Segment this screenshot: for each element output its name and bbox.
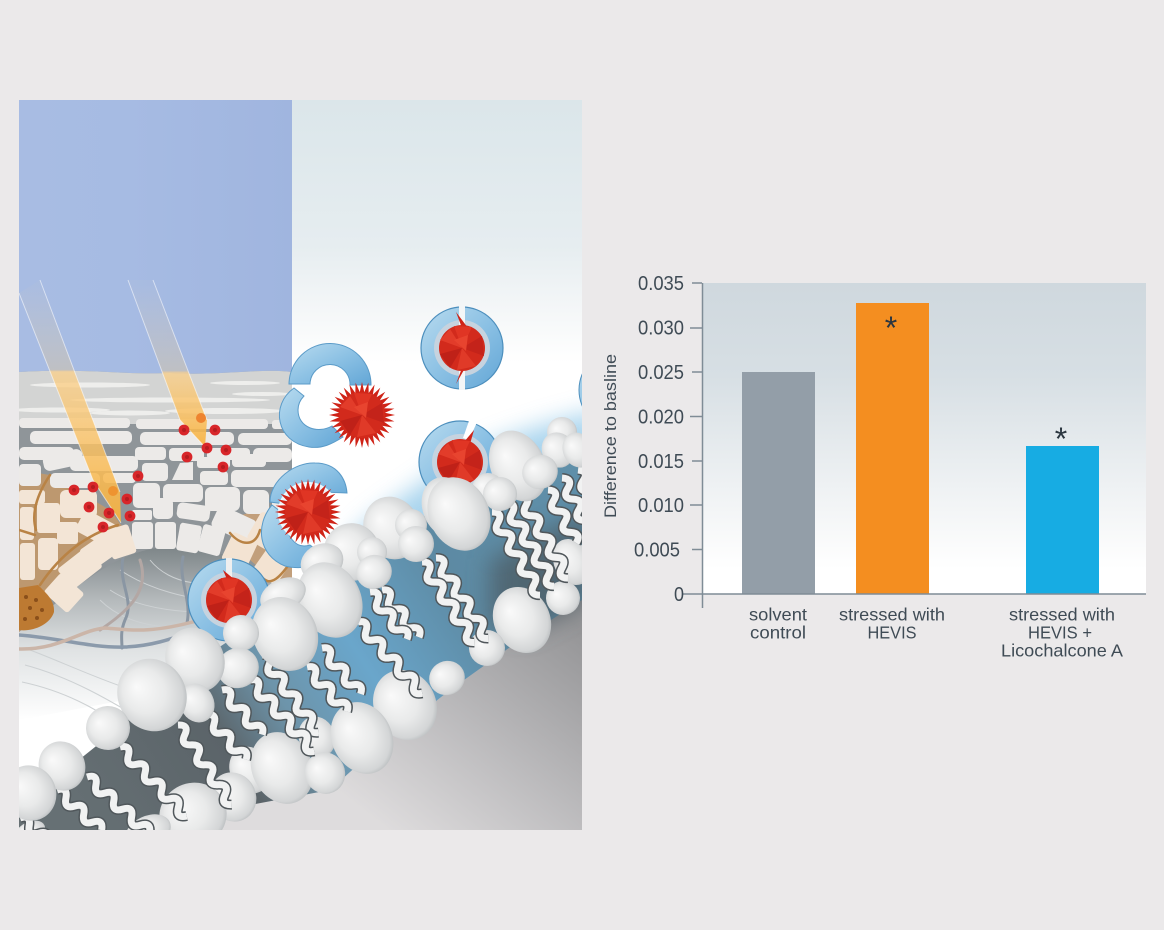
y axis values: 0.005 — [634, 540, 680, 562]
y axis values — [634, 273, 684, 606]
y axis values: 0.010 — [638, 495, 684, 517]
y axis values: 0.035 — [638, 273, 684, 295]
label: stressed with HEVIS + Licochalcone A: Licochalcone A — [1001, 640, 1123, 660]
skin and cell membrane illustration — [19, 100, 582, 830]
lipid bilayer — [19, 417, 582, 830]
label: stressed with HEVIS — [839, 604, 945, 642]
label: stressed with HEVIS: HEVIS — [868, 622, 916, 642]
label: stressed with HEVIS + Licochalcone A — [1001, 604, 1123, 660]
label: stressed with HEVIS: stressed with — [839, 604, 945, 624]
y axis values: 0.025 — [638, 362, 684, 384]
lower lipid heads — [19, 539, 582, 830]
pigment branches — [19, 475, 292, 585]
chart axes and ticks — [683, 283, 1146, 608]
significance asterisk on HEVIS bar: * — [885, 310, 897, 346]
plot background — [703, 283, 1146, 594]
y axis values: 0.015 — [638, 451, 684, 473]
bar: solvent control — [742, 372, 815, 594]
free radicals in skin — [69, 425, 231, 532]
antioxidant capsule within the membrane — [379, 571, 461, 653]
y axis values: 0.030 — [638, 318, 684, 340]
significance asterisk on Licochalcone A bar: * — [1055, 421, 1067, 457]
antioxidant capsule over dermis — [188, 558, 270, 641]
tan mortar near pigment zones — [19, 470, 125, 632]
upper lipid heads — [0, 412, 599, 829]
dermis under the skin arch — [19, 547, 272, 710]
pigment cell — [19, 585, 54, 630]
label: stressed with HEVIS + Licochalcone A: HEVIS + — [1028, 622, 1092, 642]
antioxidant capsule closed, top — [421, 306, 503, 390]
light rays penetrating the skin — [19, 280, 207, 523]
blue glow above the membrane — [346, 400, 582, 526]
y axis title: Difference to basline — [601, 354, 620, 518]
open capsule with radical, lower — [261, 463, 347, 568]
keratinocyte cells — [19, 418, 292, 557]
y axis values: 0 — [674, 584, 684, 606]
label: solvent control: control — [750, 622, 806, 642]
background panels — [19, 100, 582, 830]
label: solvent control: solvent — [749, 604, 807, 624]
edge capsule at the right border — [578, 374, 582, 406]
grey floor below the membrane — [222, 600, 582, 830]
skin layers — [10, 371, 292, 632]
label: solvent control — [749, 604, 807, 642]
label: stressed with HEVIS + Licochalcone A: stressed with — [1009, 604, 1115, 624]
cell membrane backdrop — [19, 450, 590, 830]
bar: stressed with HEVIS + Licochalcone A — [1026, 446, 1099, 594]
antioxidant capsule slightly open, centre — [418, 420, 494, 486]
bar: stressed with HEVIS — [856, 303, 929, 594]
lipid tails — [20, 467, 582, 830]
blood vessels — [19, 557, 200, 649]
open capsule releasing radical, top — [279, 344, 395, 448]
stratum corneum — [19, 371, 292, 424]
y axis values: 0.020 — [638, 406, 684, 428]
